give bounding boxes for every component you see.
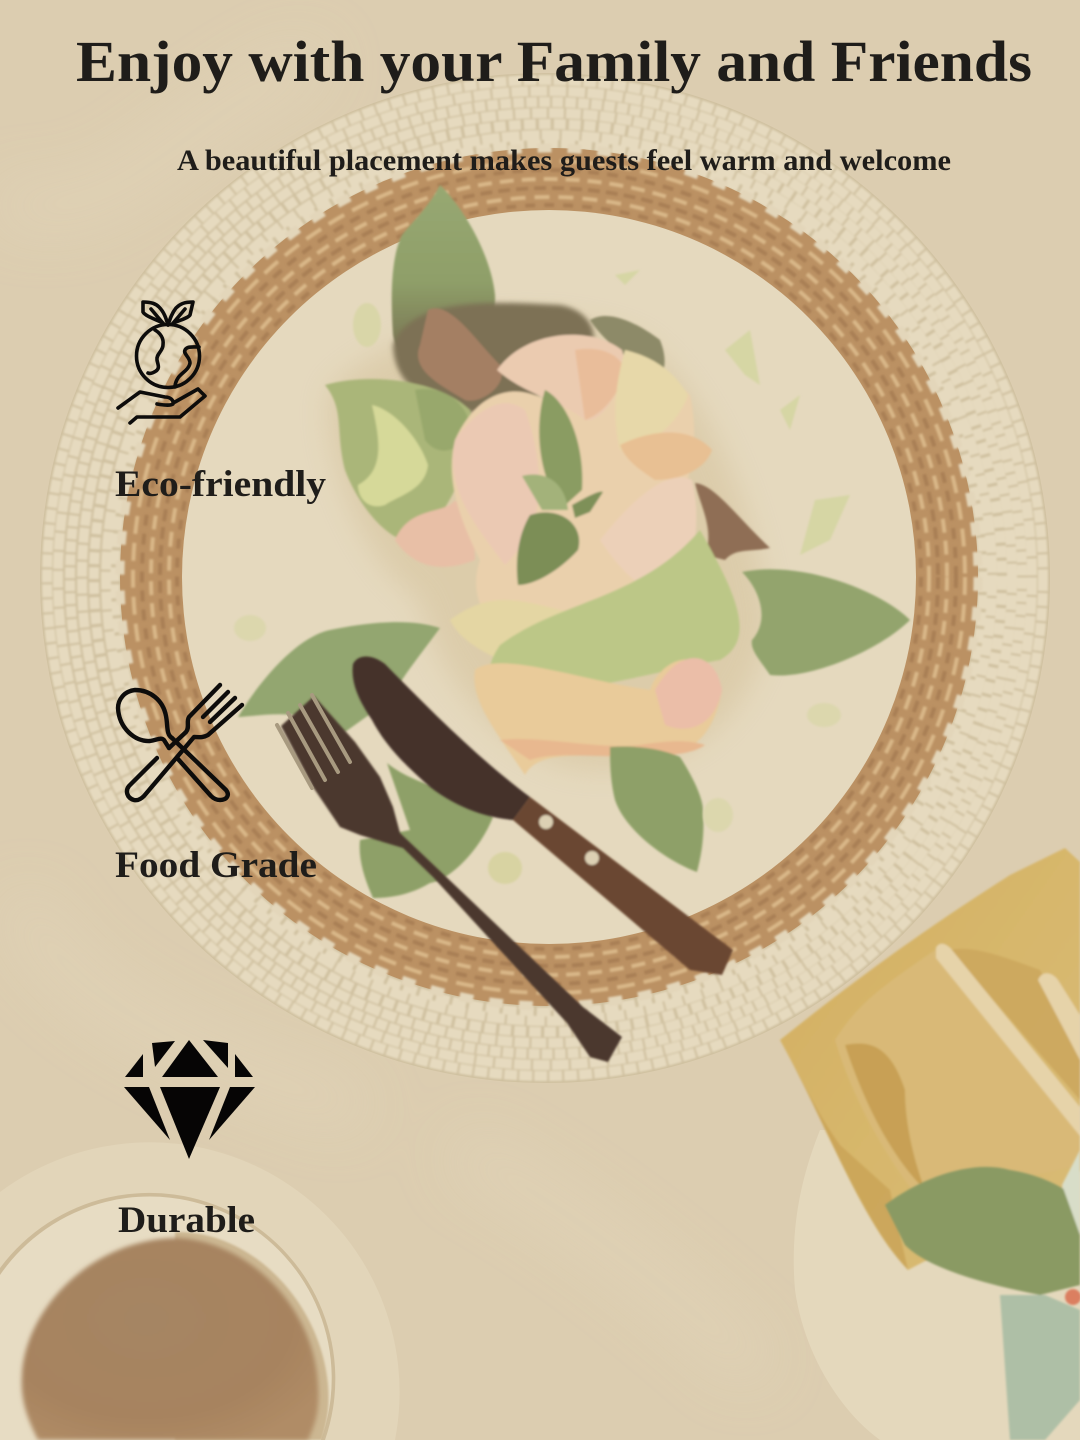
top basil leaf xyxy=(392,185,495,360)
icon: crossed spoon and fork xyxy=(118,685,242,800)
ham slices xyxy=(452,372,694,640)
label: Eco-friendly: Eco-friendly xyxy=(115,464,327,505)
leaves xyxy=(742,569,910,676)
cup and saucer xyxy=(0,1142,400,1440)
placemat: woven charger xyxy=(40,73,1050,1083)
label: Food Grade: Food Grade xyxy=(115,845,317,886)
icon: diamond xyxy=(124,1040,255,1159)
icon: earth in hand with sprout xyxy=(118,302,205,423)
plate xyxy=(182,210,916,944)
subtitle: A beautiful placement makes guests feel warm and welcome xyxy=(177,144,951,177)
right dark lettuce xyxy=(695,483,770,560)
sprigs and dressing dots xyxy=(234,270,850,884)
side plate xyxy=(794,1130,1080,1440)
center basil xyxy=(539,390,582,508)
fork xyxy=(277,695,622,1062)
holly leaf xyxy=(885,1150,1080,1440)
lower greens and ham xyxy=(450,600,642,683)
label: Durable: Durable xyxy=(118,1200,255,1241)
knife xyxy=(353,656,733,975)
title: Enjoy with your Family and Friends xyxy=(76,29,1032,94)
napkin xyxy=(780,848,1080,1270)
salad xyxy=(234,185,910,898)
